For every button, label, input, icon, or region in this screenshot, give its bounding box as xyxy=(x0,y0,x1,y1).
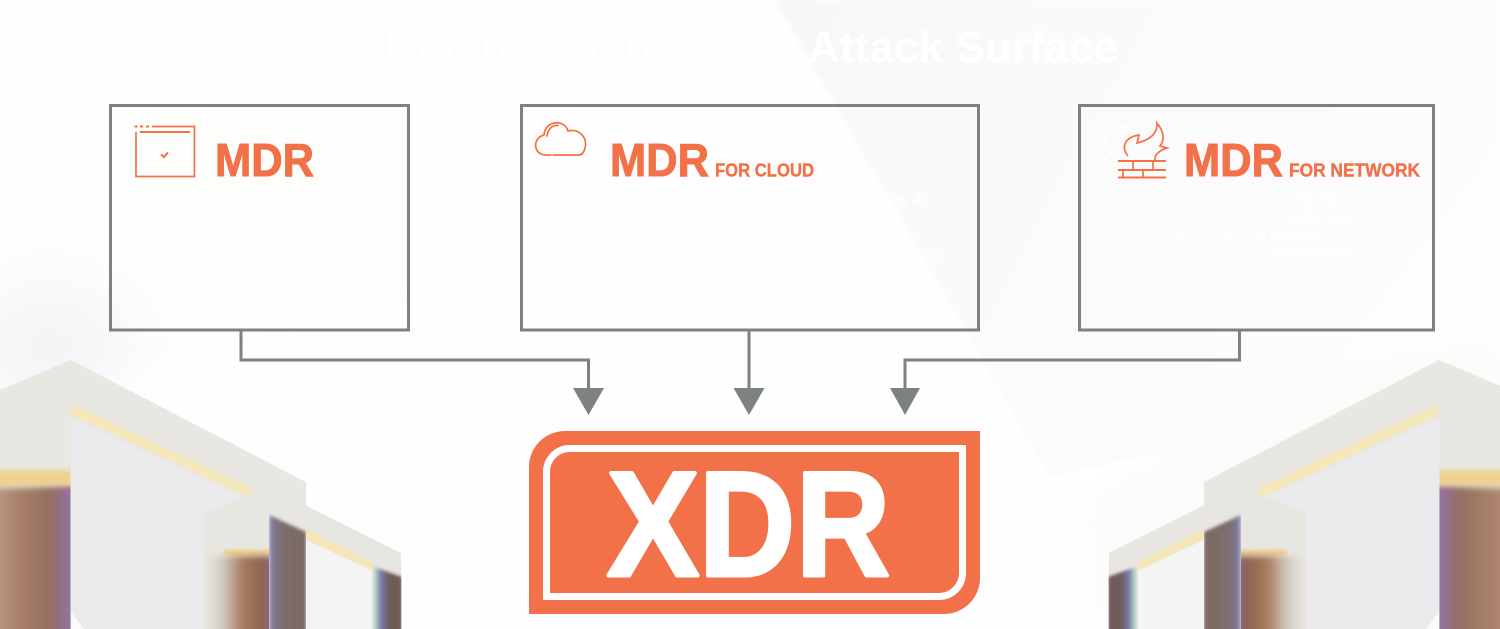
text block: cloud description: Our analysts investigate threats for your whole company xyxy=(545,246,942,262)
subheading: for network: FOR NETWORK xyxy=(1289,160,1421,180)
panel: MDR for Network xyxy=(1080,106,1434,330)
prism artwork right xyxy=(1108,360,1500,629)
panel: MDR xyxy=(110,106,408,330)
text block: MDR description: MDR provides detection and response xyxy=(134,192,349,208)
arrow: MDR for Cloud to XDR xyxy=(734,331,764,415)
icon: magnifier xyxy=(1096,126,1136,167)
arrow: MDR for Network to XDR xyxy=(890,331,1240,415)
XDR wordmark: X xyxy=(607,440,699,608)
text block: cloud description: and automation for workloads and containers. xyxy=(545,210,838,226)
text block: cloud description: across every cloud provider you use. xyxy=(545,264,781,280)
XDR badge xyxy=(529,431,980,614)
icon: browser window xyxy=(134,126,194,176)
XDR wordmark: R xyxy=(796,440,890,608)
text block: MDR description: Threat hunting and alert triage are delivered xyxy=(134,228,369,244)
XDR wordmark xyxy=(607,440,890,608)
subheading: for cloud: FOR CLOUD xyxy=(715,160,814,180)
heading: MDR: MDR xyxy=(215,134,314,186)
panel: MDR for Cloud xyxy=(522,106,978,330)
prism artwork left xyxy=(0,360,402,629)
arrow: MDR to XDR xyxy=(241,331,604,415)
text block: MDR description xyxy=(133,192,369,262)
XDR wordmark: D xyxy=(699,440,795,608)
text block: network description: context to data from other security layers. xyxy=(1104,246,1359,262)
text block: network description: perimeter devices such as firewalls. Data xyxy=(1104,210,1355,226)
icon: cloud xyxy=(536,123,586,155)
heading: MDR for Network: MDR xyxy=(1184,134,1283,186)
icon: firewall xyxy=(1118,123,1167,178)
text block: network description: MDR for Network provides visibility into xyxy=(1104,192,1339,208)
text block: MDR description: with full context around each incident. xyxy=(133,246,354,262)
heading: MDR for Cloud: MDR xyxy=(610,134,709,186)
text block: network description: from these devices can add valuable xyxy=(1104,228,1319,244)
text block: MDR description: managed by a dedicated team. xyxy=(134,210,314,226)
text block: network description xyxy=(1104,192,1359,262)
text block: cloud description xyxy=(545,192,942,280)
title: Defense Across the Attack Surface xyxy=(385,23,1118,72)
text block: cloud description: MDR for Cloud offers cloud monitoring enhanced by AI xyxy=(545,192,927,208)
